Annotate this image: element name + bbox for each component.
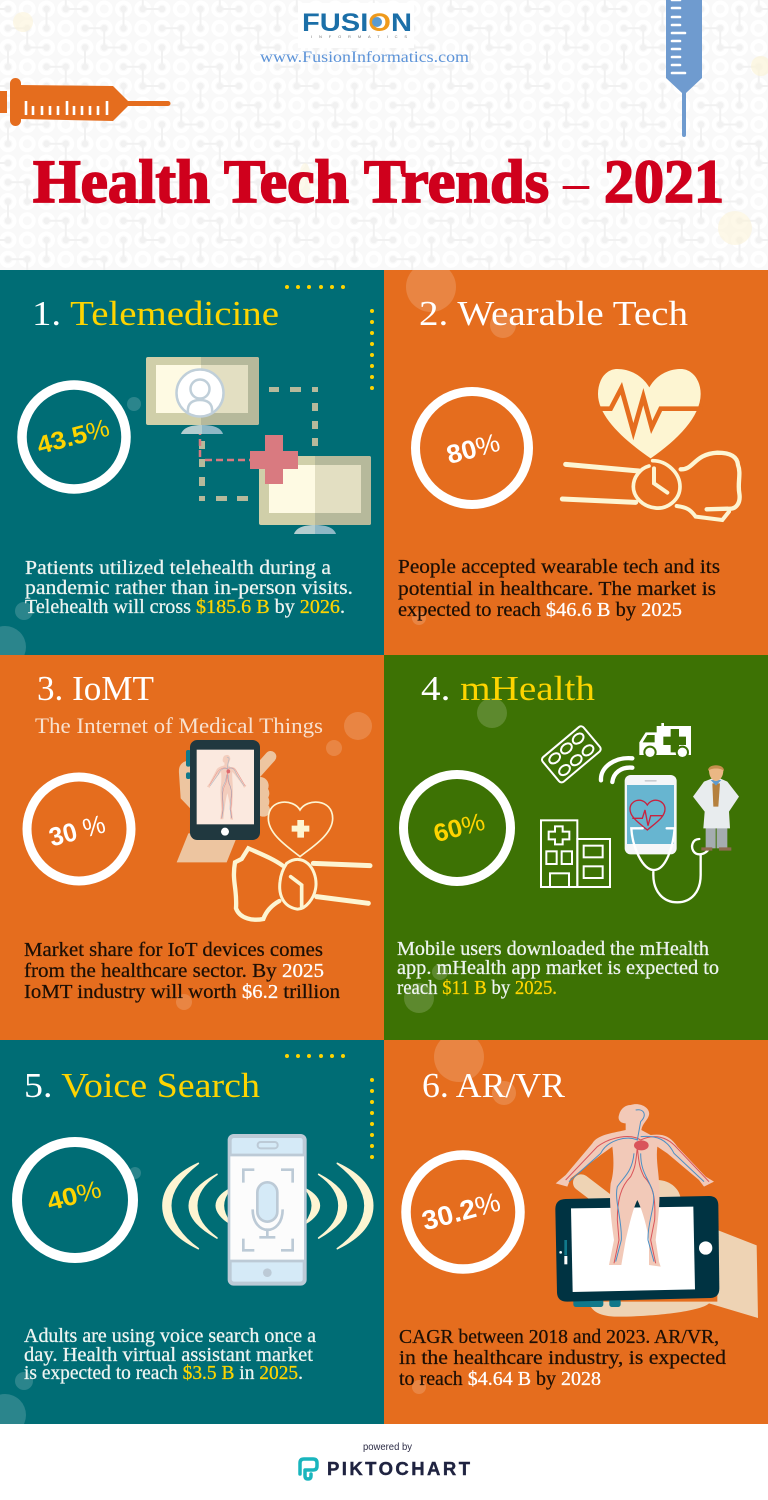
subtitle: The Internet of Medical Things (35, 713, 323, 738)
heading: 1. Telemedicine: 1. Telemedicine (32, 294, 279, 333)
panel: IoMT (0, 655, 384, 1040)
stat ring: 80% (416, 392, 528, 504)
stat ring: 30.2%: 30.2% (419, 1187, 504, 1236)
heading: 6. AR/VR: 6. AR/VR (422, 1066, 566, 1105)
text: mHealth description: app. mHealth app market is expected to (397, 958, 719, 979)
stat ring: 43.5%: 43.5% (34, 414, 113, 460)
text: AR/VR description: CAGR between 2018 and 2023. AR/VR, (399, 1326, 719, 1348)
footer: powered by Piktochart: PIKTOCHART (327, 1458, 471, 1479)
title: Trends (364, 149, 549, 216)
panel: mHealth (384, 655, 768, 1040)
icon: doctor (693, 765, 739, 851)
text: mHealth description: Mobile users downloaded the mHealth (397, 939, 709, 960)
header background (0, 0, 768, 270)
title: Health (33, 149, 210, 216)
text: IoMT description (24, 939, 340, 1003)
icon: wireless signal (601, 758, 632, 782)
title: Tech (224, 149, 349, 216)
text: AR/VR description (399, 1326, 726, 1390)
logo: Fusion Informatics (298, 3, 414, 48)
icon: phone in hand with AR body (555, 1104, 758, 1318)
icon: phone in hand with body scan (177, 740, 370, 920)
title (33, 149, 724, 216)
text: IoMT description: Market share for IoT devices comes (24, 939, 323, 961)
icon: telehealth monitors (146, 357, 371, 534)
stat ring: 60% (404, 774, 510, 882)
text: IoMT description: from the healthcare sector. By 2025 (24, 960, 324, 982)
footer: powered by Piktochart: powered by (363, 1441, 413, 1453)
icon: phone with microphone and sound waves (163, 1135, 373, 1284)
icon: pill blister pack (541, 725, 602, 784)
stat ring: 30% (27, 777, 131, 881)
icon: heart rate and smartwatch (562, 369, 740, 520)
panel: AR/VR (384, 1032, 768, 1424)
stat ring: 30.2% (406, 1155, 520, 1269)
text: wearable tech description: potential in healthcare. The market is (398, 578, 716, 600)
panel: wearable tech (384, 262, 768, 655)
icon: hospital building (541, 820, 610, 887)
text: voice search description (24, 1326, 316, 1384)
text: telemedicine description: Telehealth will cross $185.6 B by 2026. (25, 597, 345, 618)
text: mHealth description: reach $11 B by 2025. (397, 978, 557, 999)
heading: 4. mHealth: 4. mHealth (421, 669, 596, 708)
text: AR/VR description: in the healthcare industry, is expected (399, 1347, 726, 1369)
stat ring: 40%: 40% (44, 1175, 104, 1217)
icon: mobile health illustration (541, 723, 739, 902)
logo: Fusion Informatics: INFORMATICS (311, 34, 407, 39)
text: telemedicine description: Patients utilized telehealth during a (25, 558, 331, 579)
text: telemedicine description (25, 558, 353, 618)
text: voice search description: is expected to reach $3.5 B in 2025. (24, 1363, 303, 1384)
text: AR/VR description: to reach $4.64 B by 2028 (399, 1368, 601, 1390)
logo: Fusion Informatics: FUSI ON (302, 9, 412, 37)
icon: blue syringe (666, 0, 702, 137)
stat ring: 60%: 60% (431, 808, 488, 848)
panel: telemedicine (0, 270, 384, 668)
stat ring: 30%: 30 % (46, 809, 109, 852)
text: wearable tech description: expected to reach $46.6 B by 2025 (398, 599, 682, 621)
title: – (562, 149, 589, 216)
text: IoMT description: IoMT industry will worth $6.2 trillion (24, 981, 340, 1003)
heading: 2. Wearable Tech: 2. Wearable Tech (419, 294, 689, 333)
stat ring: 43.5% (22, 385, 126, 489)
text: wearable tech description (398, 556, 720, 621)
panel: voice search (0, 1040, 384, 1436)
text: voice search description: Adults are using voice search once a (24, 1326, 316, 1347)
icon: ambulance (639, 723, 691, 759)
heading: 5. Voice Search: 5. Voice Search (24, 1066, 261, 1105)
heading: 3. IoMT: 3. IoMT (37, 669, 154, 708)
icon: orange syringe (0, 78, 171, 126)
stat ring: 40% (17, 1142, 133, 1258)
icon: stethoscope (631, 828, 709, 902)
text: telemedicine description: pandemic rather than in-person visits. (25, 578, 353, 599)
text: mHealth description (397, 939, 719, 999)
decorative dots (285, 285, 374, 390)
decorative dots (285, 1054, 374, 1159)
title: 2021 (604, 149, 724, 216)
icon: smartphone with heart (625, 775, 677, 854)
footer: powered by Piktochart (300, 1441, 471, 1479)
text: voice search description: day. Health virtual assistant market (24, 1345, 314, 1366)
website url: www.FusionInformatics.com (260, 49, 470, 66)
stat ring: 80%: 80% (443, 427, 503, 470)
text: wearable tech description: People accepted wearable tech and its (398, 556, 720, 578)
